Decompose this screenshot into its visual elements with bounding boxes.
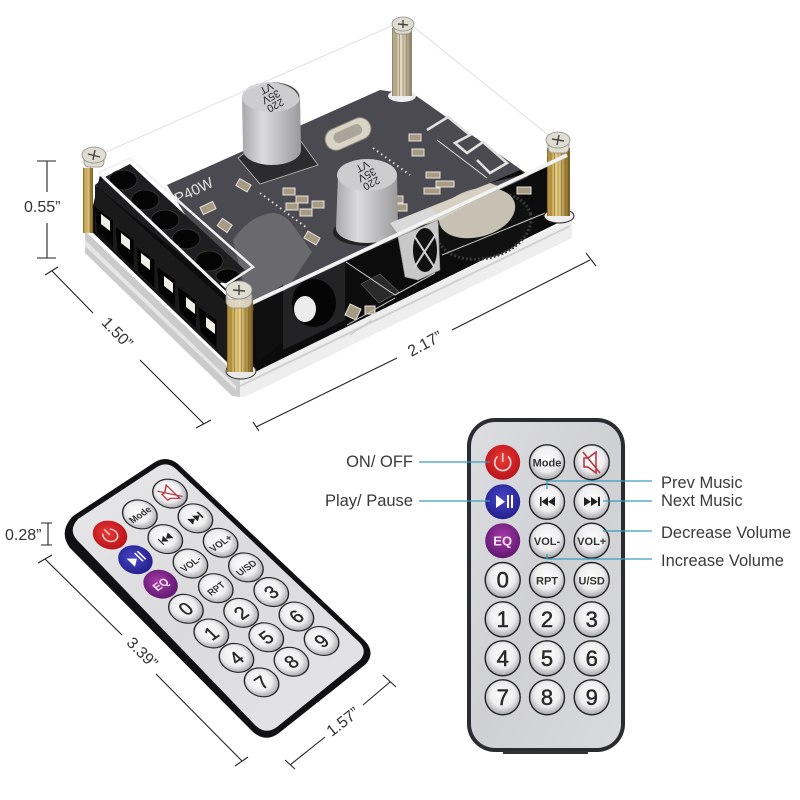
capacitor one marking: 35V [260, 87, 282, 106]
dimension: remote width 1.57 [285, 675, 396, 769]
terminal white contacts [101, 214, 215, 334]
mute button [574, 445, 609, 480]
dimension: width 1.50: 1.50” [98, 314, 135, 352]
rear post [388, 28, 416, 102]
amplifier board photo [82, 17, 574, 397]
next button [574, 484, 609, 519]
angled play button [111, 540, 160, 580]
angled EQ button: EQ [151, 576, 172, 594]
angled next button [171, 498, 220, 539]
EQ button: EQ [493, 534, 512, 548]
angled zero row [162, 547, 270, 629]
left post [83, 168, 93, 233]
terminal block [95, 164, 245, 362]
terminal screw holes [109, 170, 240, 283]
crystal [322, 114, 374, 154]
angled mode button: Mode [127, 505, 154, 526]
right post [544, 148, 574, 223]
angled number keys: 3 [260, 582, 284, 603]
surface mount parts [200, 134, 531, 245]
regulator chip [361, 274, 399, 303]
capacitor two marking [351, 156, 382, 193]
antenna trace [427, 117, 507, 178]
right black board corner [490, 170, 550, 195]
capacitor two marking: VT [353, 158, 371, 175]
number keys: 4 [497, 646, 509, 671]
dimension: remote length 3.39 [38, 555, 248, 766]
callout: next music [603, 492, 743, 510]
angled power button [86, 515, 134, 555]
dimension: height 0.55: 0.55” [24, 199, 60, 216]
capacitor one [238, 82, 318, 184]
shaded board area under acrylic [167, 90, 530, 306]
callout: next music: Next Music [661, 492, 743, 510]
play pause button [485, 484, 520, 519]
angled mute button [146, 473, 194, 514]
angled remote casing [65, 459, 371, 738]
angled number keys: 1 [200, 624, 224, 645]
board traces [346, 205, 565, 335]
callout: increase volume [547, 552, 784, 570]
angled remote face [73, 464, 364, 731]
callout: prev music: Prev Music [661, 474, 743, 492]
dimension: remote length 3.39: 3.39” [123, 634, 161, 672]
angled number keys: 9 [310, 631, 334, 652]
angled number keys: 5 [255, 628, 279, 649]
volume buttons [530, 523, 609, 558]
dimension: length 2.17 [253, 253, 596, 431]
volume buttons: VOL- [534, 536, 560, 548]
thumbwheel potentiometer [429, 180, 539, 269]
callout: on off: ON/ OFF [346, 453, 413, 471]
angled number keys: 2 [230, 603, 254, 624]
zero row: RPT [536, 576, 558, 588]
lower black circuit board [88, 155, 570, 372]
number keys: 3 [586, 607, 598, 632]
dimension: width 1.50 [45, 267, 211, 428]
angled number keys [187, 572, 346, 703]
callout: play pause: Play/ Pause [325, 492, 413, 510]
infrared receiver [390, 207, 440, 280]
number keys: 5 [541, 646, 553, 671]
number keys: 7 [497, 685, 509, 710]
EQ button [485, 523, 520, 558]
capacitor one marking: VT [257, 80, 275, 97]
number keys [485, 602, 609, 715]
angled number keys: 8 [280, 652, 304, 673]
lying capacitor [233, 213, 312, 312]
angled volume buttons [166, 523, 245, 584]
remote with callouts [467, 418, 625, 754]
power jack [253, 262, 345, 362]
acrylic top panel [88, 20, 567, 308]
angled number keys: 4 [225, 648, 249, 669]
number keys: 2 [541, 607, 553, 632]
angled volume buttons: VOL+ [208, 533, 236, 554]
power button [485, 445, 520, 480]
angled EQ button [136, 564, 185, 604]
number keys: 6 [586, 646, 598, 671]
small lower parts [345, 304, 375, 320]
angled zero row: 0 [175, 599, 199, 620]
capacitor two marking: 220 [361, 174, 382, 192]
dimension: remote thickness 0.28: 0.28” [5, 527, 41, 544]
mode button: Mode [533, 458, 561, 470]
number keys: 1 [497, 607, 509, 632]
capacitor one marking [255, 78, 286, 115]
angled zero row: U/SD [234, 558, 260, 579]
angled previous button [141, 519, 190, 559]
screws [82, 17, 570, 308]
remote body [467, 418, 625, 752]
angled remote [65, 459, 371, 738]
volume buttons: VOL+ [577, 536, 606, 548]
angled volume buttons: VOL- [178, 554, 204, 575]
callout: decrease volume: Decrease Volume [661, 524, 791, 542]
number keys: 8 [541, 685, 553, 710]
callout: increase volume: Increase Volume [661, 552, 784, 570]
dimension: remote thickness 0.28 [5, 523, 52, 545]
angled number keys: 7 [250, 673, 274, 694]
zero row [485, 562, 609, 598]
reflected band [400, 183, 500, 232]
capacitor two [333, 159, 401, 246]
number keys: 9 [586, 685, 598, 710]
dimension: remote width 1.57: 1.57” [324, 704, 363, 740]
callout: prev music [547, 474, 743, 492]
capacitor two marking: 35V [356, 165, 378, 184]
capacitor one marking: 220 [265, 96, 286, 114]
angled zero row: RPT [205, 580, 229, 598]
front post [226, 300, 256, 379]
zero row: 0 [497, 568, 509, 592]
board silkscreen P40W: P40W [172, 174, 217, 208]
angled number keys: 6 [285, 607, 309, 628]
dimension: height 0.55 [24, 161, 60, 258]
zero row: U/SD [579, 576, 605, 588]
previous button [530, 484, 564, 519]
angled mode button [115, 494, 164, 535]
mode button [530, 445, 564, 480]
terminal wire sockets [95, 207, 216, 348]
base plate [85, 218, 572, 397]
dimension: length 2.17: 2.17” [405, 328, 445, 361]
chip pin rows [260, 148, 410, 228]
